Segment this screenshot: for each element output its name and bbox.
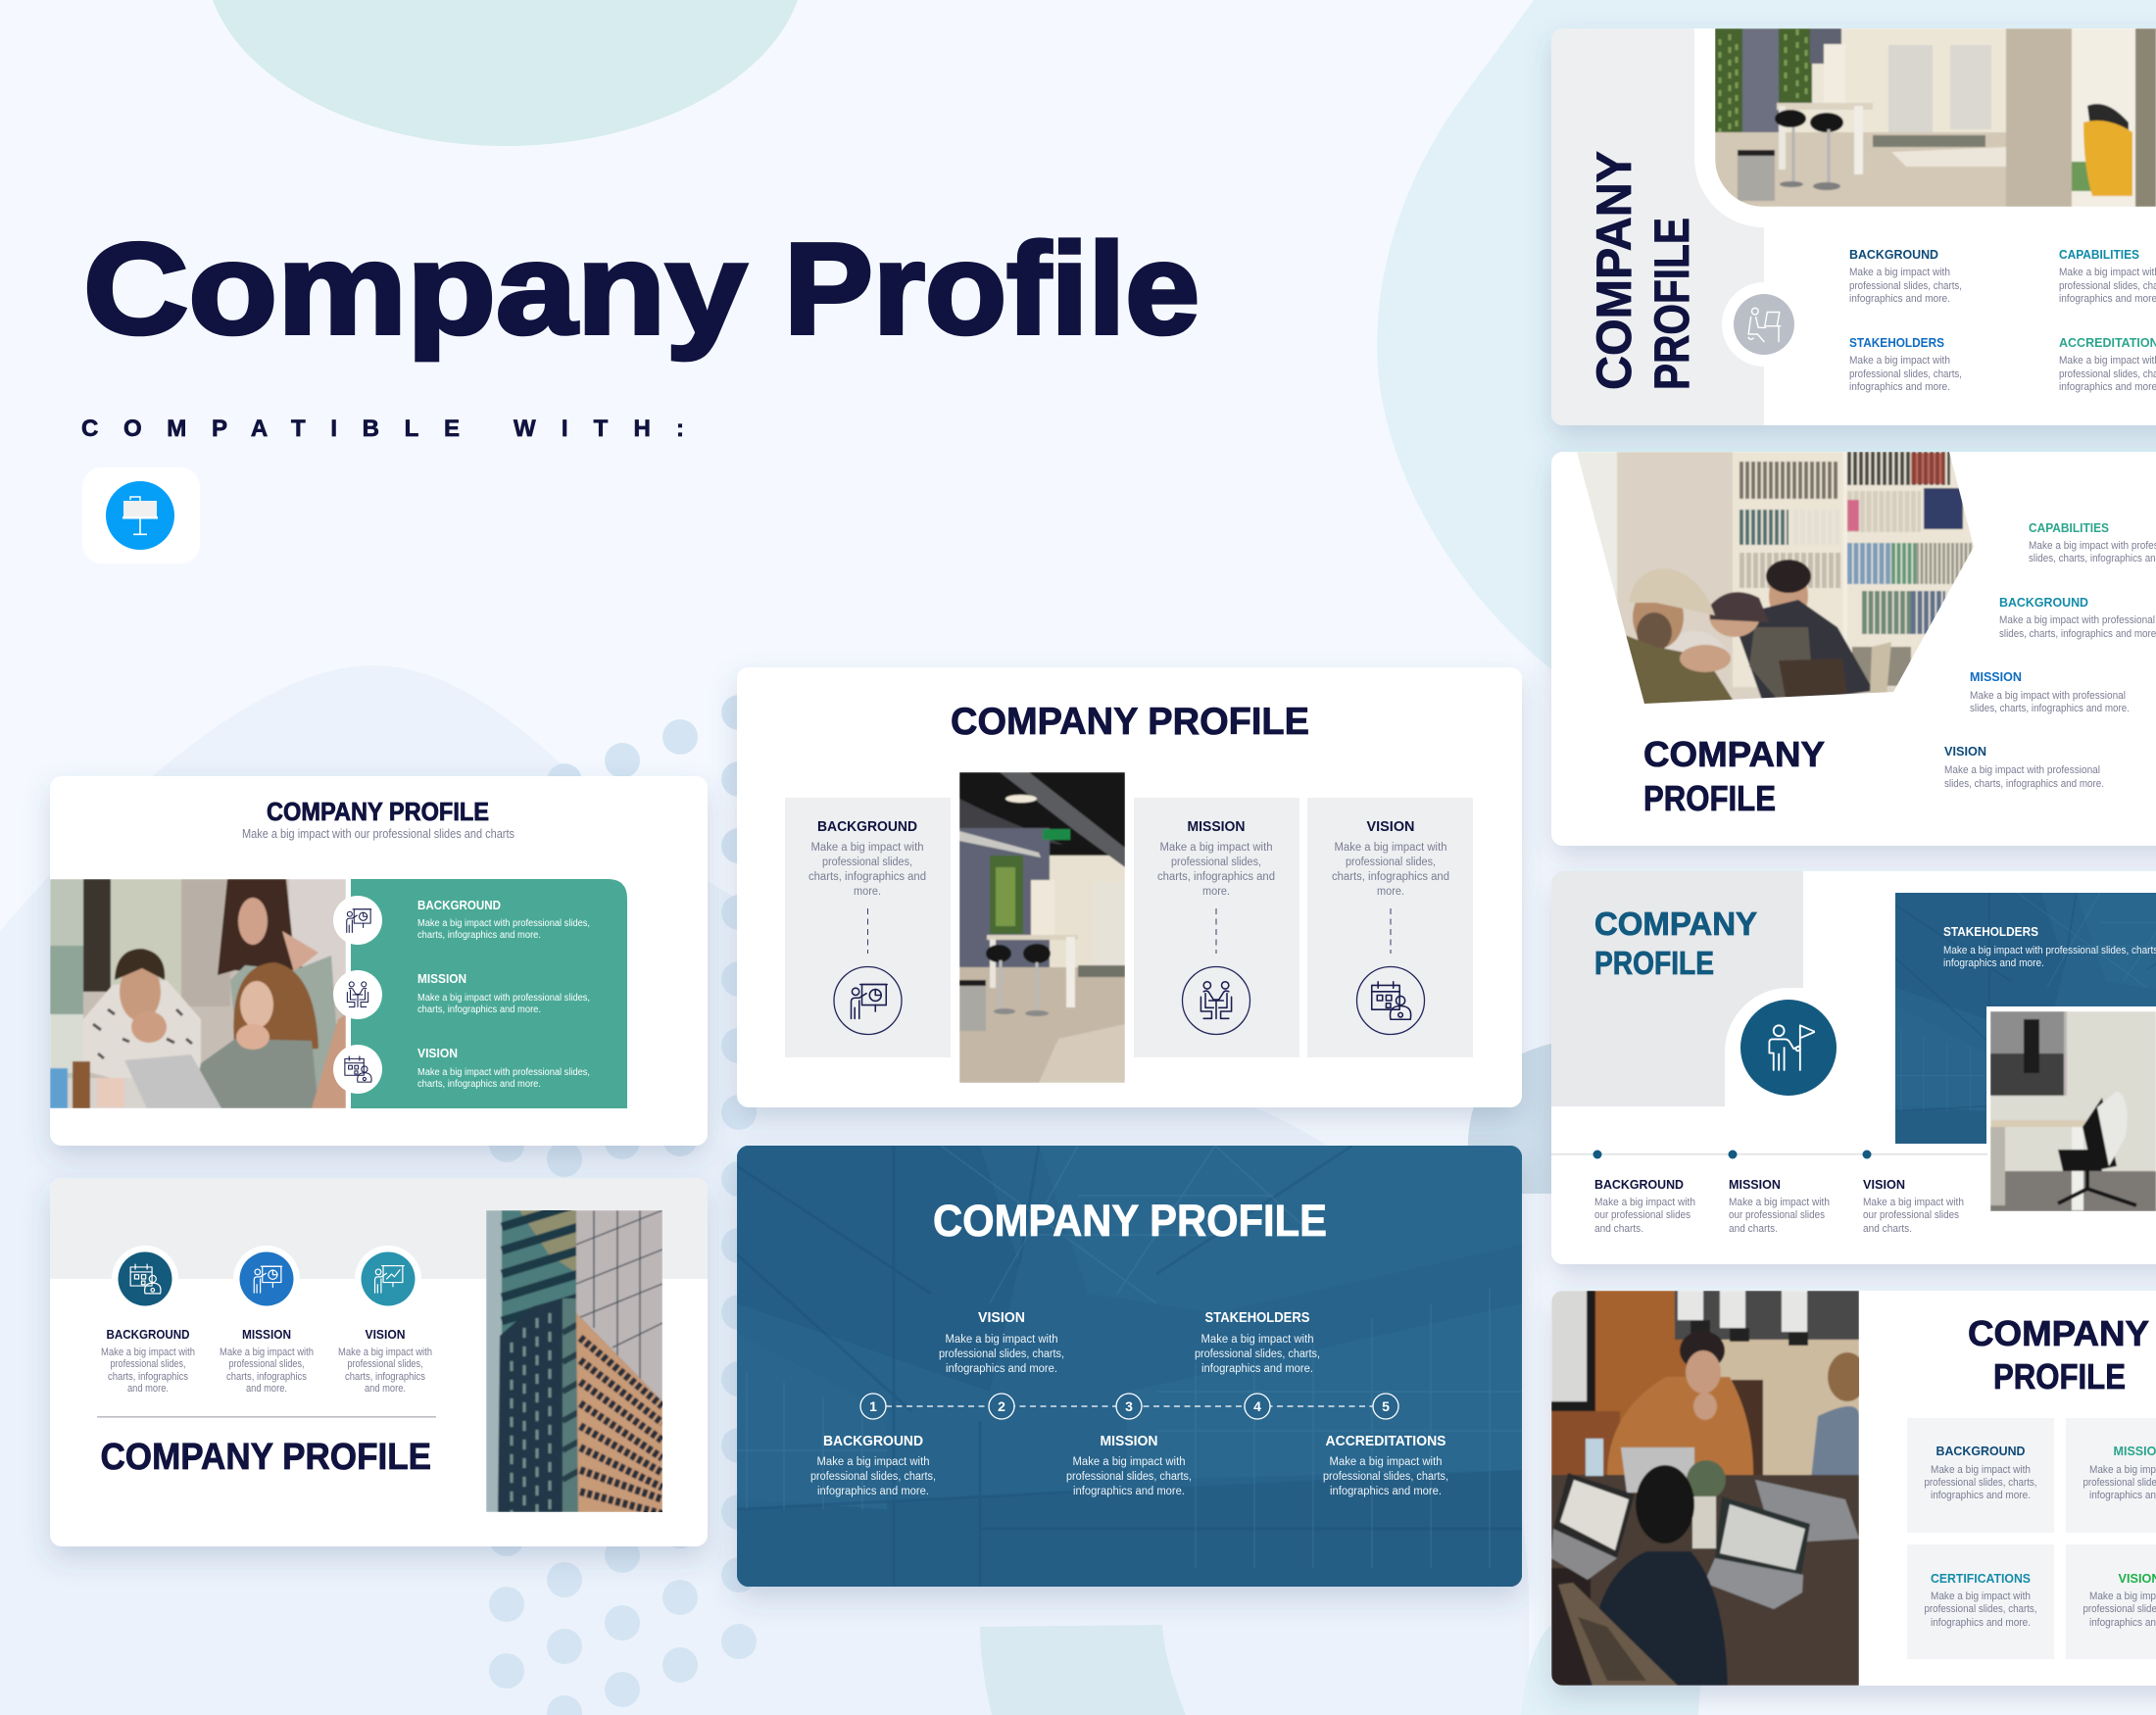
text: background: BACKGROUND [1849, 247, 1938, 262]
photo: office lobby [959, 772, 1125, 1083]
text: background [810, 1434, 936, 1497]
text: vision: professional slides, charts, [939, 1348, 1064, 1360]
text: background: BACKGROUND [1594, 1177, 1684, 1192]
title [83, 217, 1200, 361]
text: vision [338, 1327, 432, 1395]
text: vision: Make a big impact with professional [1944, 764, 2100, 776]
text: vision: slides, charts, infographics and more. [1944, 778, 2104, 790]
title: Company [83, 217, 747, 361]
panel: slide with vertical heading [1551, 28, 2156, 425]
panel: teal list [333, 879, 627, 1108]
text: stakeholders: infographics and more. [1849, 381, 1950, 393]
text: mission: and more. [246, 1383, 287, 1395]
text: stakeholders [1943, 924, 2156, 969]
text: background: professional slides, charts, [1849, 280, 1962, 292]
text: mission: MISSION [1729, 1177, 1781, 1192]
text: vision: VISION [1863, 1177, 1905, 1192]
heading: COMPANY PROFILE [100, 1437, 431, 1478]
heading: COMPANY PROFILE [933, 1196, 1327, 1246]
text: mission: charts, infographics [226, 1371, 307, 1383]
column: vision: VISION [1366, 819, 1415, 835]
column: vision: professional slides, [1346, 857, 1436, 868]
text: background [101, 1327, 195, 1395]
timeline connector [886, 1405, 1373, 1407]
text: background [1849, 247, 1962, 305]
heading: COMPANY [1968, 1313, 2149, 1353]
card: background [1907, 1418, 2054, 1533]
text: accreditations: Make a big impact with [1329, 1456, 1443, 1468]
text: background: our professional slides [1594, 1209, 1690, 1221]
step 5: 5 [1382, 1398, 1390, 1414]
text: stakeholders: STAKEHOLDERS [1205, 1310, 1310, 1326]
text: background: infographics and more. [817, 1486, 929, 1497]
text: vision [939, 1310, 1064, 1375]
photo: men laughing in a library [1568, 452, 1980, 710]
column: mission: more. [1202, 886, 1230, 898]
text: vision: Make a big impact with [1863, 1197, 1964, 1208]
heading: COMPANY [1643, 734, 1825, 774]
text: mission: MISSION [242, 1327, 291, 1342]
text: capabilities [2029, 520, 2156, 564]
text: mission: infographics and more. [1073, 1486, 1185, 1497]
compatible with heading: WITH: [514, 416, 684, 442]
icon: meeting [333, 970, 382, 1019]
photo: lobby with elevators [1715, 28, 2156, 207]
column: vision [1307, 798, 1473, 1057]
heading [1594, 906, 1757, 981]
text: mission [1970, 669, 2130, 714]
text: vision [1944, 744, 2104, 790]
heading: PROFILE [1594, 945, 1714, 981]
text: vision: Make a big impact with professional slides, [417, 1067, 590, 1078]
decorative dots [489, 695, 757, 1715]
text: mission: Make a big impact with professional slides, [417, 993, 590, 1004]
text: mission: Make a big impact with [1072, 1456, 1186, 1468]
text: accreditations: professional slides, charts, [1323, 1471, 1448, 1483]
card: certifications: professional slides, charts, [1925, 1603, 2036, 1615]
text: stakeholders: STAKEHOLDERS [1943, 924, 2038, 939]
panel: slide with timeline and office photo [1551, 871, 2156, 1264]
text: vision: VISION [978, 1310, 1025, 1326]
heading: vertical [1587, 151, 1699, 390]
card: vision [2066, 1544, 2156, 1659]
text: background: BACKGROUND [823, 1434, 923, 1449]
text: mission: Make a big impact with professional [1970, 690, 2126, 702]
text: background: Make a big impact with [817, 1456, 929, 1468]
text: vision: and charts. [1863, 1223, 1912, 1235]
step 4: 4 [1253, 1398, 1261, 1414]
timeline dots [1593, 1151, 1872, 1158]
heading: PROFILE [1993, 1356, 2126, 1396]
text: stakeholders: professional slides, charts, [1195, 1348, 1320, 1360]
heading [1968, 1313, 2149, 1396]
text: mission: Make a big impact with [1729, 1197, 1830, 1208]
step 4 [1245, 1394, 1270, 1419]
column: mission: Make a big impact with [1160, 842, 1272, 854]
heading: COMPANY PROFILE [267, 797, 489, 826]
text: mission: MISSION [1100, 1434, 1158, 1449]
text: vision [1863, 1177, 1964, 1235]
step 2 [989, 1394, 1014, 1419]
text: background [1999, 595, 2156, 640]
step 3: 3 [1125, 1398, 1133, 1414]
text: mission: MISSION [1970, 669, 2022, 684]
text: mission: professional slides, [229, 1358, 304, 1370]
text: stakeholders [1849, 335, 1962, 393]
text: vision: VISION [1944, 744, 1986, 759]
text: background: and charts. [1594, 1223, 1643, 1235]
icon: desk worker [1722, 282, 1794, 367]
text: mission: our professional slides [1729, 1209, 1825, 1221]
text: vision: Make a big impact with [945, 1334, 1058, 1346]
card: mission [2066, 1418, 2156, 1533]
photo: white office with chair [1986, 1006, 2156, 1211]
title: Profile [784, 217, 1200, 361]
compatible with heading: COMPATIBLE [81, 416, 460, 442]
text: mission: and charts. [1729, 1223, 1778, 1235]
icon: presenter [233, 1246, 300, 1312]
heading: COMPANY PROFILE [951, 701, 1309, 743]
text: mission [220, 1327, 314, 1395]
card: background: BACKGROUND [1936, 1444, 2025, 1458]
column: background: Make a big impact with [811, 842, 923, 854]
icon: keynote app [82, 467, 200, 564]
panel: slide with teal list [50, 776, 708, 1146]
text: capabilities: CAPABILITIES [2059, 247, 2139, 262]
text: stakeholders: Make a big impact with [1201, 1334, 1313, 1346]
text: background: infographics and more. [1849, 293, 1950, 305]
step 1: 1 [869, 1398, 877, 1414]
text: vision: and more. [365, 1383, 406, 1395]
text: background: Make a big impact with [1594, 1197, 1695, 1208]
text: capabilities [2059, 247, 2156, 305]
panel: slide with coworking photo [1551, 1291, 2156, 1686]
text: mission [1729, 1177, 1830, 1235]
text: mission [1066, 1434, 1192, 1497]
step 3 [1116, 1394, 1142, 1419]
card: background: Make a big impact with [1931, 1464, 2031, 1476]
heading: vertical: COMPANY [1587, 151, 1642, 390]
step 1 [860, 1394, 886, 1419]
panel: slide with library photo [1551, 452, 2156, 846]
text: background: charts, infographics and more. [417, 930, 541, 941]
text: background: professional slides, charts, [810, 1471, 936, 1483]
text: background: professional slides, [110, 1358, 186, 1370]
text: mission [417, 971, 590, 1015]
text: mission: charts, infographics and more. [417, 1004, 541, 1015]
text: vision: Make a big impact with [338, 1347, 432, 1358]
panel: blue timeline slide [737, 1146, 1522, 1587]
text: background: charts, infographics [108, 1371, 188, 1383]
text: vision: VISION [417, 1046, 458, 1060]
text: background: and more. [127, 1383, 169, 1395]
text: mission: slides, charts, infographics and more. [1970, 703, 2130, 714]
column: mission: MISSION [1188, 819, 1245, 835]
text: mission: MISSION [417, 971, 466, 986]
text: mission: Make a big impact with [220, 1347, 314, 1358]
text: background [1594, 1177, 1695, 1235]
card: certifications: infographics and more. [1931, 1617, 2031, 1629]
column: vision: Make a big impact with [1335, 842, 1446, 854]
blue photo panel [1895, 893, 2156, 1157]
text: vision: charts, infographics and more. [417, 1079, 541, 1090]
icon: calendar person [333, 1045, 382, 1094]
text: accreditations: infographics and more. [1330, 1486, 1442, 1497]
text: vision: our professional slides [1863, 1209, 1959, 1221]
card: background: professional slides, charts, [1925, 1477, 2036, 1489]
text: vision: charts, infographics [345, 1371, 425, 1383]
card: certifications: Make a big impact with [1931, 1591, 2031, 1602]
icon: presenter [333, 896, 382, 945]
text: accreditations [2059, 335, 2156, 393]
text: mission: professional slides, charts, [1066, 1471, 1192, 1483]
column: background [785, 798, 951, 1057]
heading: COMPANY [1594, 906, 1757, 942]
heading [1643, 734, 1825, 818]
icon: person with flag [1740, 1000, 1837, 1096]
column: mission [1134, 798, 1299, 1057]
panel: slide with four columns [737, 667, 1522, 1107]
text: background: BACKGROUND [106, 1327, 190, 1342]
column: background: charts, infographics and [808, 871, 926, 883]
photo: team around a laptop [50, 879, 346, 1108]
text: stakeholders [1195, 1310, 1320, 1375]
column: background: BACKGROUND [817, 819, 917, 835]
text: vision: infographics and more. [946, 1363, 1057, 1375]
column: mission: professional slides, [1171, 857, 1261, 868]
column: mission: charts, infographics and [1157, 871, 1275, 883]
text: background: BACKGROUND [417, 898, 501, 912]
text: background: BACKGROUND [1999, 595, 2088, 610]
text: background: Make a big impact with professional slides, [417, 918, 590, 929]
text: accreditations: ACCREDITATIONS [1325, 1434, 1446, 1449]
subtitle: Make a big impact with our professional slides and charts [242, 827, 514, 841]
text: stakeholders: Make a big impact with [1849, 355, 1950, 367]
card: background: infographics and more. [1931, 1490, 2031, 1501]
text: stakeholders: infographics and more. [1943, 957, 2044, 969]
text: stakeholders: STAKEHOLDERS [1849, 335, 1944, 350]
text: vision: VISION [365, 1327, 406, 1342]
heading: vertical: PROFILE [1644, 218, 1699, 390]
icon: chart presenter [355, 1246, 421, 1312]
step 5 [1373, 1394, 1398, 1419]
heading: PROFILE [1643, 778, 1776, 818]
panel: slide with building photo [50, 1178, 708, 1546]
text: vision: professional slides, [347, 1358, 423, 1370]
text: stakeholders: professional slides, charts, [1849, 368, 1962, 380]
card: certifications: CERTIFICATIONS [1931, 1571, 2031, 1586]
column: vision: charts, infographics and [1332, 871, 1449, 883]
icon: calendar person [112, 1246, 178, 1312]
text: vision [417, 1046, 590, 1090]
column: background: professional slides, [822, 857, 912, 868]
text: background: Make a big impact with [101, 1347, 195, 1358]
text: accreditations [1323, 1434, 1448, 1497]
text: stakeholders: infographics and more. [1201, 1363, 1313, 1375]
photo: coworking table [1551, 1291, 1867, 1686]
text: capabilities: CAPABILITIES [2029, 520, 2109, 535]
column: vision: more. [1377, 886, 1404, 898]
step 2: 2 [998, 1398, 1005, 1414]
column: background: more. [854, 886, 881, 898]
card: certifications [1907, 1544, 2054, 1659]
photo: office tower [486, 1203, 662, 1514]
text: background [417, 898, 590, 941]
text: background: Make a big impact with [1849, 267, 1950, 278]
compatible with heading [81, 416, 684, 442]
